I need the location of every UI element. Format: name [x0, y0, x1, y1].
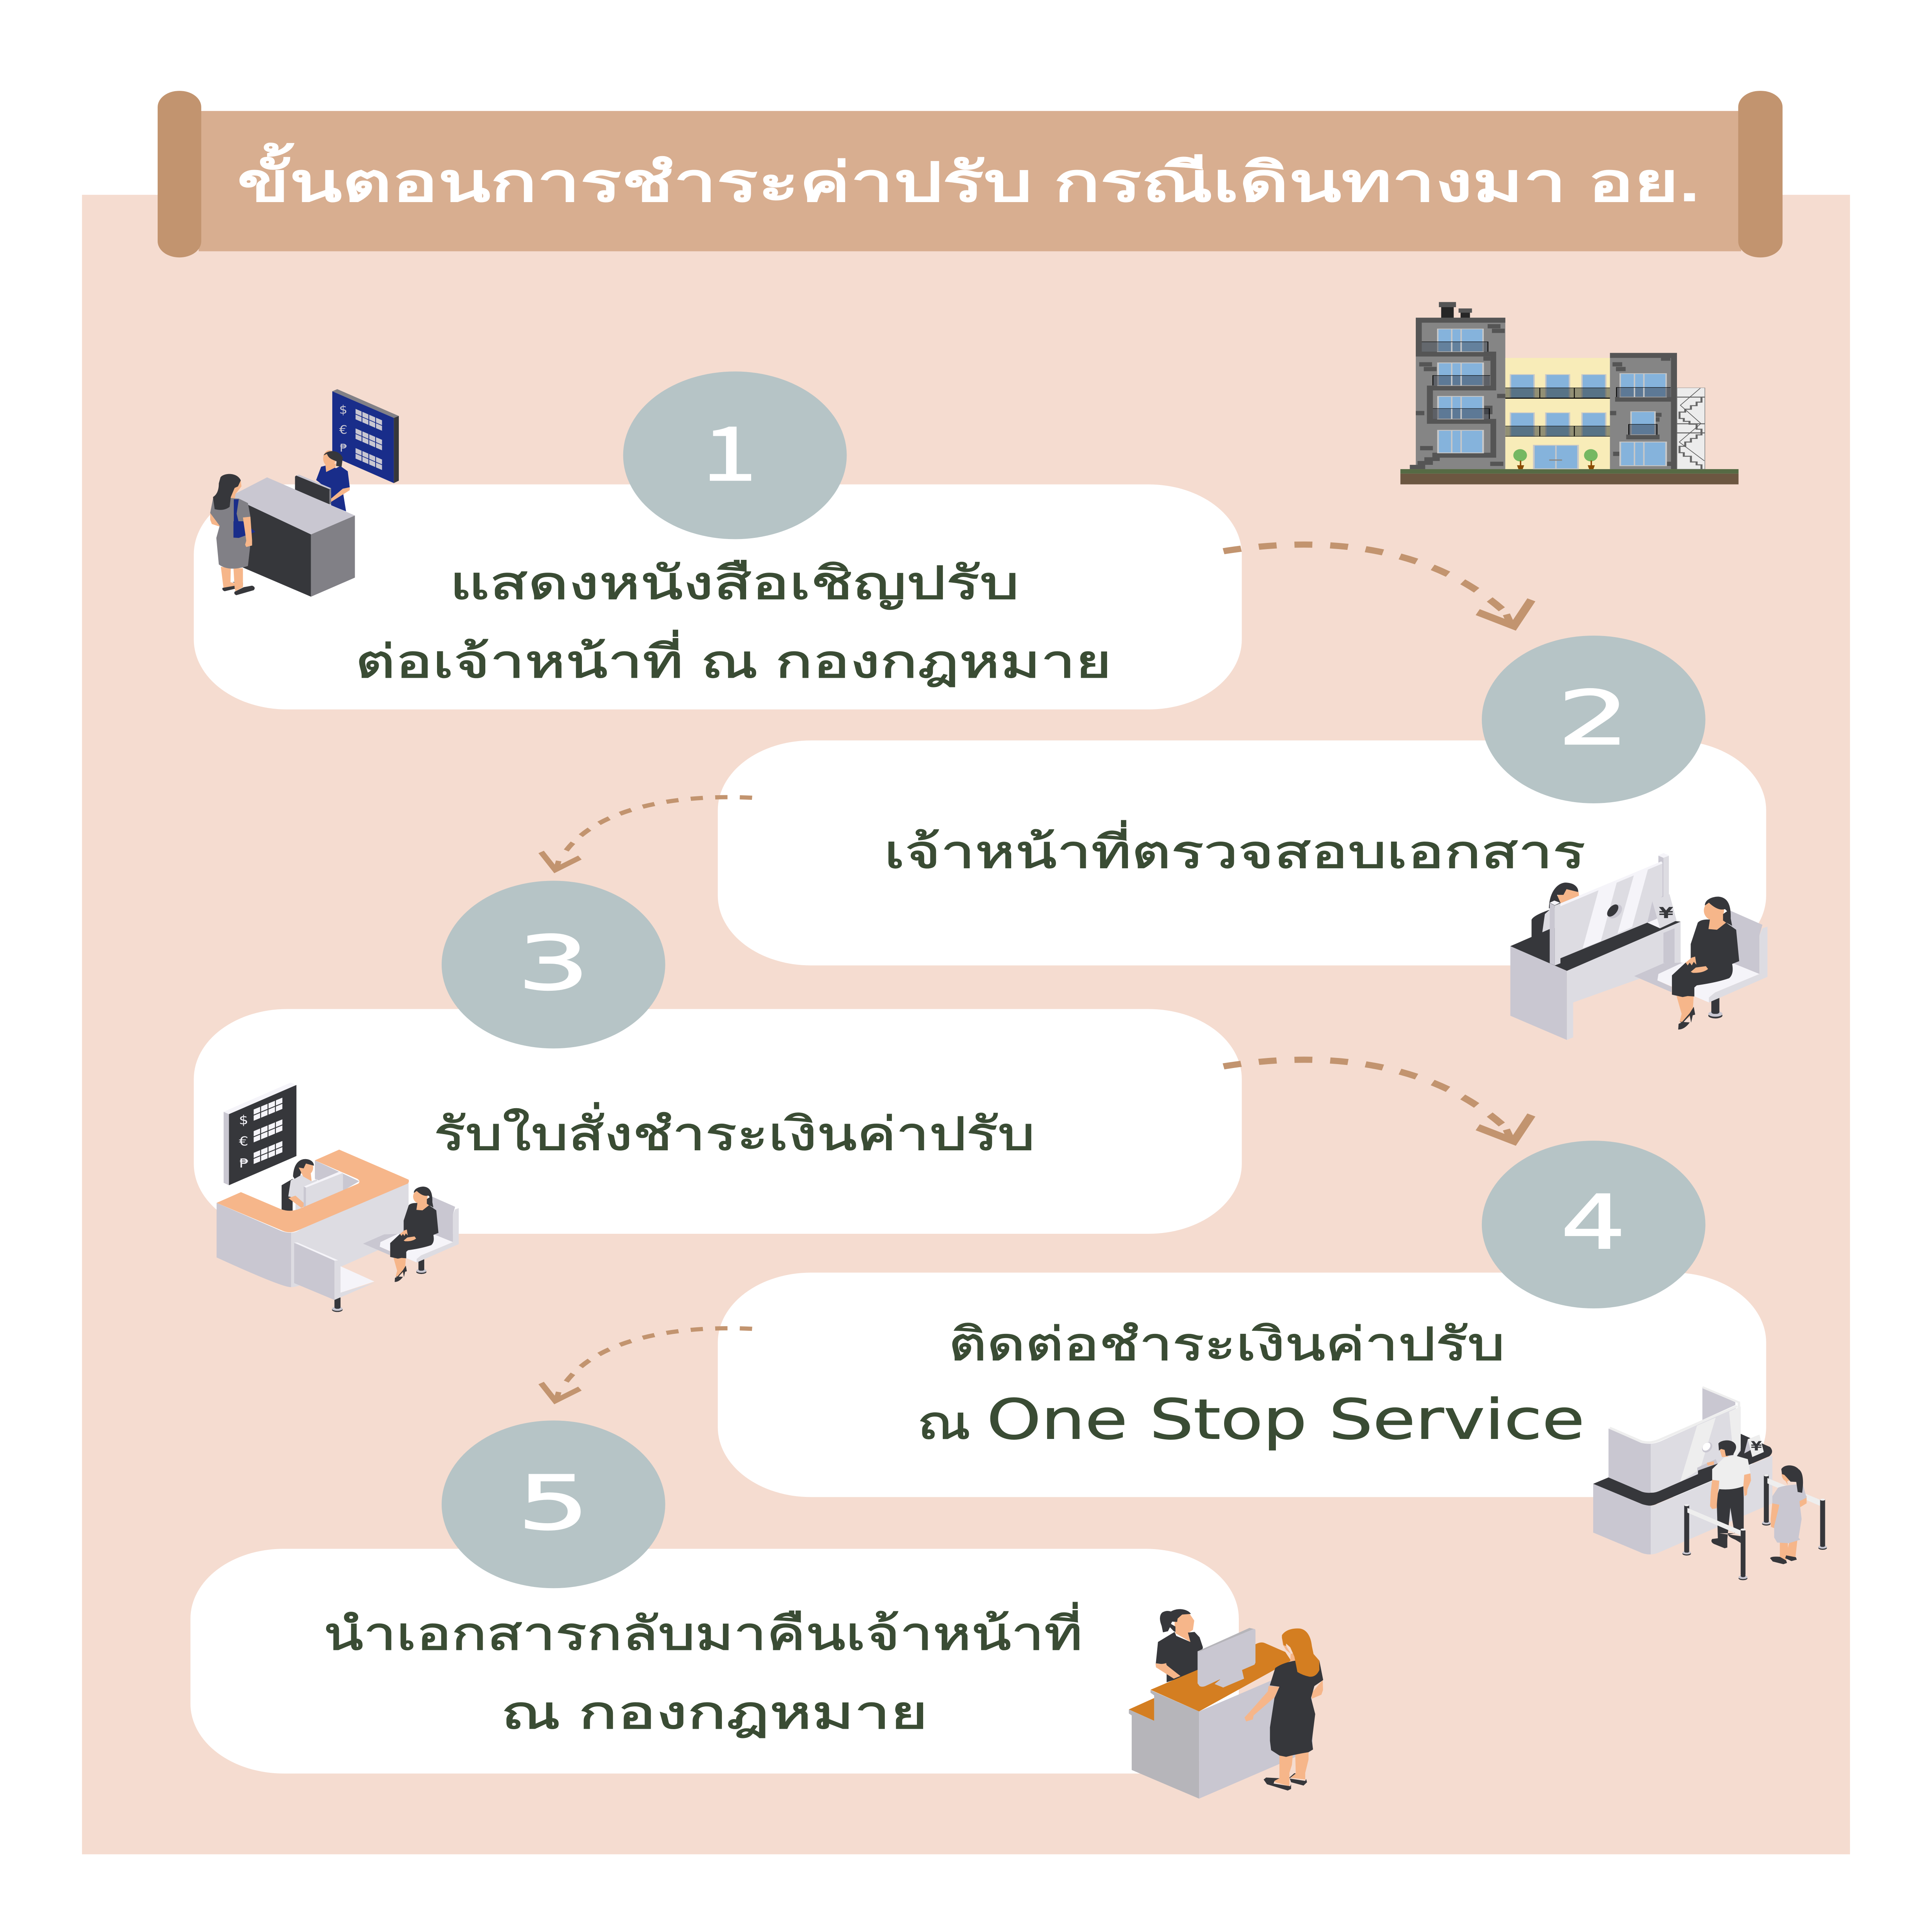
step 4 number: 4 — [1561, 1179, 1626, 1266]
icon: reception desk with board and seated customer, step 3: ₱ — [240, 1156, 249, 1171]
step 1 number circle — [623, 371, 847, 539]
step 5 text line 1: นำเอกสารกลับมาคืนเจ้าหน้าที่ — [323, 1602, 1083, 1660]
banner right roll — [1738, 91, 1782, 257]
step 2 number circle — [1482, 636, 1706, 803]
step 2 text: เจ้าหน้าที่ตรวจสอบเอกสาร — [884, 820, 1585, 878]
step 4 text line 2: ณ One Stop Service — [917, 1387, 1585, 1452]
icon: teller counter with seated customer, step 2 — [1510, 853, 1767, 1040]
icon: reception desk with board and seated customer, step 3: $ — [239, 1113, 248, 1128]
step 3 text: รับใบสั่งชำระเงินค่าปรับ — [434, 1102, 1035, 1160]
step 1 text line 2: ต่อเจ้าหน้าที่ ณ กองกฎหมาย — [355, 630, 1112, 687]
panel: step 4 — [718, 1141, 1766, 1497]
step 3 number circle — [442, 881, 665, 1048]
icon: service counter with queue posts, step 4 — [1593, 1387, 1827, 1580]
panel: step 1 — [194, 371, 1242, 709]
arrow: step 4 to step 5 — [541, 1328, 752, 1401]
step 2 card — [718, 740, 1766, 966]
arrow: step 3 to step 4 — [1223, 1060, 1531, 1141]
step 3 number: 3 — [517, 920, 590, 1007]
icon: document counter with staff and customer, step 5 — [1129, 1609, 1323, 1799]
step 5 text line 2: ณ กองกฎหมาย — [501, 1687, 928, 1738]
icon: service counter with queue posts, step 4: ¥ — [1751, 1438, 1762, 1453]
step 4 text line 1: ติดต่อชำระเงินค่าปรับ — [949, 1318, 1505, 1370]
step 4 card — [718, 1273, 1766, 1497]
icon: counter with exchange board, step 1 — [210, 389, 399, 597]
arrow: step 1 to step 2 — [1223, 544, 1531, 626]
title banner — [158, 91, 1782, 257]
title: ขั้นตอนการชำระค่าปรับ กรณีเดินทางมา อย. — [237, 143, 1700, 213]
banner left roll — [158, 91, 201, 257]
icon: counter with exchange board, step 1: $ — [339, 403, 347, 417]
icon: teller counter with seated customer, step 2: ¥ — [1659, 905, 1673, 922]
arrow: step 2 to step 3 — [541, 797, 752, 870]
step 5 number circle — [442, 1420, 665, 1588]
step 1 card — [194, 485, 1242, 709]
seated customer on bench — [363, 1187, 459, 1282]
step 3 card — [194, 1009, 1242, 1234]
icon: reception desk with board and seated customer, step 3: € — [239, 1134, 248, 1149]
icon: counter with exchange board, step 1: € — [339, 423, 347, 437]
panel: main background — [82, 195, 1850, 1854]
icon: building — [1400, 302, 1738, 485]
step 5 card — [190, 1549, 1239, 1774]
step 2 number: 2 — [1557, 675, 1630, 762]
step 1 number: 1 — [702, 394, 757, 502]
panel: step 2 — [718, 636, 1766, 966]
panel: step 5 — [190, 1420, 1239, 1774]
icon: counter with exchange board, step 1: ₱ — [340, 442, 347, 454]
step 5 number: 5 — [517, 1460, 590, 1547]
panel: step 3 — [194, 881, 1242, 1234]
icon: reception desk with board and seated customer, step 3 — [217, 1083, 459, 1312]
step 1 text line 1: แสดงหนังสือเชิญปรับ — [449, 557, 1019, 610]
step 4 number circle — [1482, 1141, 1706, 1308]
